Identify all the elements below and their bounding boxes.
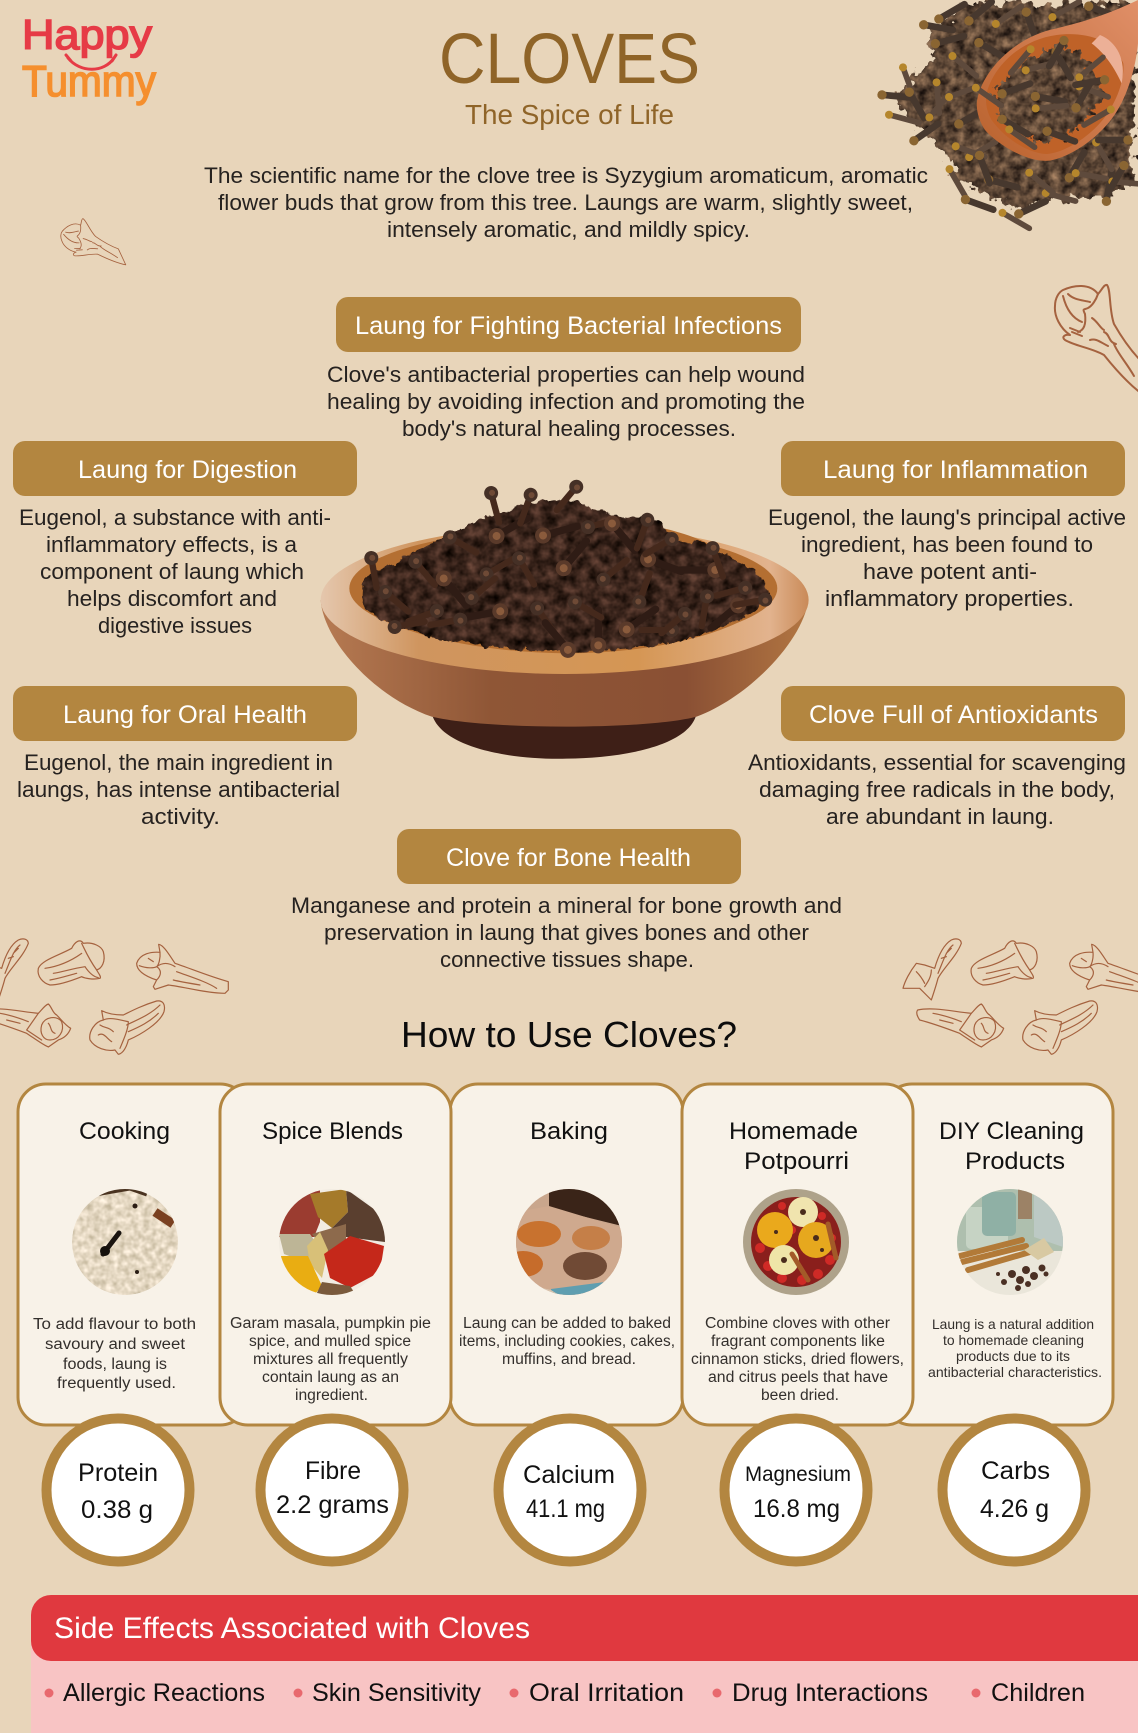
card: baking: Baking (530, 1118, 608, 1145)
card: homemade potpourri: and citrus peels that have (708, 1369, 888, 1386)
card: cooking: savoury and sweet (45, 1336, 186, 1353)
wooden spoon (977, 0, 1138, 161)
cloves in spoon (970, 34, 1116, 150)
card: cooking: Cooking (79, 1118, 170, 1145)
card: spice blends: Spice Blends (262, 1118, 403, 1145)
card: DIY cleaning products: products due to its (956, 1348, 1070, 1364)
image: spices (279, 1189, 385, 1295)
card: baking: items, including cookies, cakes, (459, 1333, 675, 1350)
card: cooking: frequently used. (57, 1375, 176, 1392)
benefit: digestion: Eugenol, a substance with anti- (19, 505, 331, 530)
card: spice blends: ingredient. (295, 1387, 368, 1404)
side effects header (31, 1595, 1138, 1661)
nutrient: carbs (942, 1418, 1086, 1562)
doodle: large clove top right (1055, 285, 1138, 394)
image: cinnamon and cloves (957, 1189, 1063, 1295)
benefit: fighting bacterial infections: Clove's antibacterial properties can help wound (327, 362, 805, 387)
benefit: antioxidants: are abundant in laung. (826, 804, 1054, 829)
bowl interior (349, 529, 777, 648)
card: homemade potpourri: been dried. (761, 1387, 839, 1404)
benefit: fighting bacterial infections: healing by avoiding infection and promoting the (327, 389, 805, 414)
side effect list: Skin Sensitivity (312, 1679, 481, 1707)
bowl rim (321, 526, 809, 674)
title: CLOVES (439, 20, 700, 99)
benefit: oral health (13, 686, 357, 829)
card: cooking (18, 1084, 248, 1425)
nutrient: fibre: 2.2 grams (276, 1491, 389, 1519)
card: DIY cleaning products: antibacterial characteristics. (928, 1364, 1102, 1380)
benefit: antioxidants: Clove Full of Antioxidants (809, 701, 1098, 729)
image: rice (72, 1188, 178, 1295)
benefit: antioxidants: Antioxidants, essential for scavenging (748, 750, 1126, 775)
benefit: inflammation: Eugenol, the laung's principal active (768, 505, 1126, 530)
card: spice blends: contain laung as an (262, 1369, 399, 1386)
nutrient: magnesium: 16.8 mg (753, 1495, 840, 1523)
nutrient: protein: Protein (78, 1459, 158, 1487)
benefit: digestion (13, 441, 357, 638)
card: cooking: foods, laung is (63, 1356, 167, 1373)
image: cookies (516, 1189, 622, 1295)
benefit: fighting bacterial infections: body's natural healing processes. (402, 416, 736, 441)
card: spice blends: spice, and mulled spice (249, 1333, 411, 1350)
side effect list: Oral Irritation (529, 1679, 684, 1707)
logo: Happy Tummy: Happy (22, 11, 152, 58)
doodles: clove group right (903, 939, 1138, 1054)
nutrient: magnesium: Magnesium (745, 1463, 851, 1486)
bowl base (432, 713, 697, 759)
card: homemade potpourri: Potpourri (744, 1148, 849, 1175)
benefit: oral health: laungs, has intense antibacterial (17, 777, 340, 802)
nutrient: carbs: 4.26 g (980, 1495, 1049, 1523)
nutrient: protein (46, 1418, 190, 1562)
card: cooking: To add flavour to both (33, 1316, 196, 1333)
subtitle: The Spice of Life (465, 99, 674, 130)
pile of cloves (363, 477, 773, 661)
benefit: digestion: Laung for Digestion (78, 456, 297, 484)
card: DIY cleaning products: Laung is a natural addition (932, 1316, 1094, 1332)
image: wooden bowl of cloves (321, 477, 809, 759)
side effect list: Allergic Reactions (63, 1679, 265, 1707)
card: homemade potpourri (682, 1084, 913, 1425)
benefit: inflammation: have potent anti- (863, 559, 1037, 584)
card: DIY cleaning products (884, 1084, 1113, 1425)
logo: Happy Tummy (22, 11, 156, 106)
nutrient: fibre (260, 1418, 404, 1562)
card: baking: Laung can be added to baked (463, 1315, 671, 1332)
bowl body (321, 600, 808, 727)
nutrient: calcium: 41.1 mg (526, 1495, 605, 1523)
nutrient: carbs: Carbs (981, 1457, 1050, 1485)
doodles: clove group left (0, 939, 228, 1054)
benefit: inflammation: inflammatory properties. (825, 586, 1074, 611)
benefit: oral health: Laung for Oral Health (63, 701, 307, 729)
image: cloves with wooden spoon (877, 0, 1138, 232)
card: homemade potpourri: fragrant components like (711, 1333, 885, 1350)
card: DIY cleaning products: DIY Cleaning (939, 1118, 1084, 1145)
benefit: bone health: Clove for Bone Health (446, 844, 691, 872)
benefit: fighting bacterial infections (327, 297, 805, 441)
card: homemade potpourri: Homemade (729, 1118, 858, 1145)
heading: how to use: How to Use Cloves? (401, 1014, 737, 1055)
card: homemade potpourri: cinnamon sticks, dried flowers, (691, 1351, 904, 1368)
benefit: oral health: activity. (141, 804, 220, 829)
card: DIY cleaning products: Products (965, 1148, 1065, 1175)
card: baking (450, 1084, 683, 1425)
logo: Happy Tummy: Tummy (22, 57, 156, 106)
card: DIY cleaning products: to homemade cleaning (943, 1332, 1084, 1348)
benefit: bone health: preservation in laung that gives bones and other (324, 920, 809, 945)
benefit: antioxidants: damaging free radicals in the body, (759, 777, 1115, 802)
intro paragraph: flower buds that grow from this tree. Laungs are warm, slightly sweet, (218, 190, 913, 215)
intro paragraph: intensely aromatic, and mildly spicy. (387, 217, 750, 242)
benefit: digestion: digestive issues (98, 613, 252, 638)
panel: side effects (31, 1595, 1138, 1733)
nutrient: protein: 0.38 g (81, 1496, 153, 1524)
card: spice blends: Garam masala, pumpkin pie (230, 1315, 431, 1332)
benefit: digestion: component of laung which (40, 559, 304, 584)
doodle: small clove top left (57, 210, 126, 285)
nutrient: calcium (498, 1418, 642, 1562)
benefit: digestion: inflammatory effects, is a (46, 532, 298, 557)
nutrient: magnesium (724, 1418, 868, 1562)
side effects header: Side Effects Associated with Cloves (54, 1612, 530, 1645)
side effect list: Children (991, 1679, 1085, 1707)
nutrient: calcium: Calcium (523, 1461, 615, 1489)
benefit: inflammation: ingredient, has been found to (801, 532, 1093, 557)
benefit: inflammation: Laung for Inflammation (823, 456, 1088, 484)
benefit: antioxidants (748, 686, 1126, 829)
card: spice blends: mixtures all frequently (253, 1351, 408, 1368)
side effect list: Drug Interactions (732, 1679, 928, 1707)
card: spice blends (220, 1084, 451, 1425)
benefit: inflammation (768, 441, 1126, 611)
card: homemade potpourri: Combine cloves with other (705, 1315, 890, 1332)
benefit: digestion: helps discomfort and (67, 586, 277, 611)
benefit: bone health: connective tissues shape. (440, 947, 694, 972)
side effect list (44, 1679, 1085, 1707)
intro paragraph (204, 163, 928, 242)
benefit: fighting bacterial infections: Laung for Fighting Bacterial Infections (355, 312, 782, 340)
image: potpourri pot (743, 1189, 849, 1295)
benefit: oral health: Eugenol, the main ingredient in (24, 750, 333, 775)
nutrient: fibre: Fibre (305, 1457, 361, 1485)
card: baking: muffins, and bread. (502, 1351, 636, 1368)
intro paragraph: The scientific name for the clove tree is Syzygium aromaticum, aromatic (204, 163, 928, 188)
benefit: bone health: Manganese and protein a mineral for bone growth and (291, 893, 842, 918)
benefit: bone health (291, 829, 842, 972)
